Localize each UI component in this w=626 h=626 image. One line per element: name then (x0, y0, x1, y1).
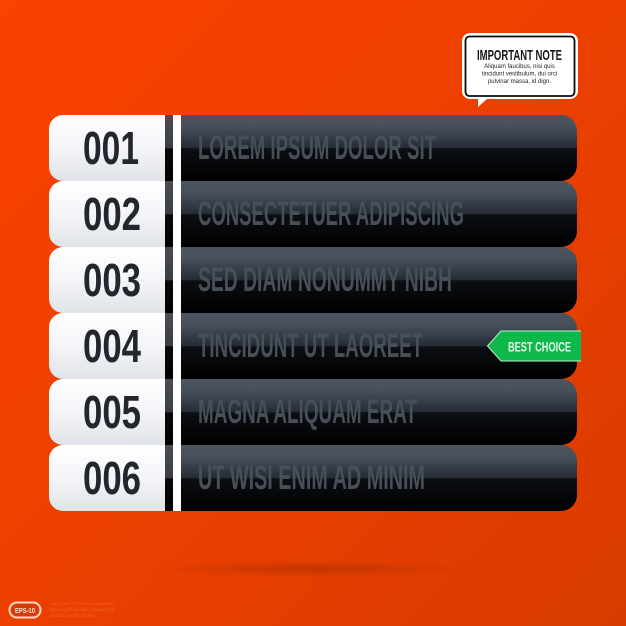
row 4 dark bar (181, 313, 577, 379)
row 3 (49, 247, 577, 313)
fine print: Lorem ipsum dolor sit amet consectetuer (50, 601, 114, 606)
row 6 stripes (165, 445, 181, 511)
row 5 stripes (165, 379, 181, 445)
row 1 label: LOREM IPSUM DOLOR SIT (198, 129, 436, 167)
row 4 (49, 313, 577, 379)
row 6 label: UT WISI ENIM AD MINIM (198, 459, 425, 497)
row 5 label: MAGNA ALIQUAM ERAT (198, 393, 417, 431)
row 6 number: 006 (83, 452, 141, 504)
row 6 number tab (49, 445, 165, 511)
row 4 stripes (165, 313, 181, 379)
row 3 number tab (49, 247, 165, 313)
row 3 dark bar (181, 247, 577, 313)
row 1 number: 001 (83, 122, 139, 174)
row 5 (49, 379, 577, 445)
badge text: EPS-10 (15, 606, 35, 615)
note body (482, 64, 557, 85)
row 6 (49, 445, 577, 511)
row 3 stripes (165, 247, 181, 313)
best choice ribbon (488, 331, 581, 361)
note body: pulvinar massa, id dign. (488, 79, 551, 85)
row 2 number: 002 (83, 188, 141, 240)
row 2 stripes (165, 181, 181, 247)
note heading: IMPORTANT NOTE (477, 47, 562, 64)
row 4 label: TINCIDUNT UT LAOREET (198, 327, 423, 365)
fine print: adipiscing elit sed diam nonummy nibh (50, 607, 114, 612)
speech bubble: important note (462, 33, 578, 107)
row 2 dark bar (181, 181, 577, 247)
floor shadow (152, 561, 472, 577)
row 1 (49, 115, 577, 181)
row 6 dark bar (181, 445, 577, 511)
row 2 number tab (49, 181, 165, 247)
row 1 number tab (49, 115, 165, 181)
row 3 number: 003 (83, 254, 141, 306)
row 5 dark bar (181, 379, 577, 445)
fine print: euismod tincidunt ut laoreet (50, 613, 96, 618)
row 4 number: 004 (83, 320, 141, 372)
row 5 number tab (49, 379, 165, 445)
row 1 dark bar (181, 115, 577, 181)
fine print (50, 601, 114, 618)
note body: Aliquam faucibus, nisi quis (484, 64, 555, 70)
best choice text: BEST CHOICE (508, 338, 571, 354)
row 2 (49, 181, 577, 247)
note body: tincidunt vestibulum, dui orci (482, 72, 557, 78)
row 5 number: 005 (83, 386, 141, 438)
EPS-10 badge (10, 602, 40, 618)
row 4 number tab (49, 313, 165, 379)
row 1 stripes (165, 115, 181, 181)
